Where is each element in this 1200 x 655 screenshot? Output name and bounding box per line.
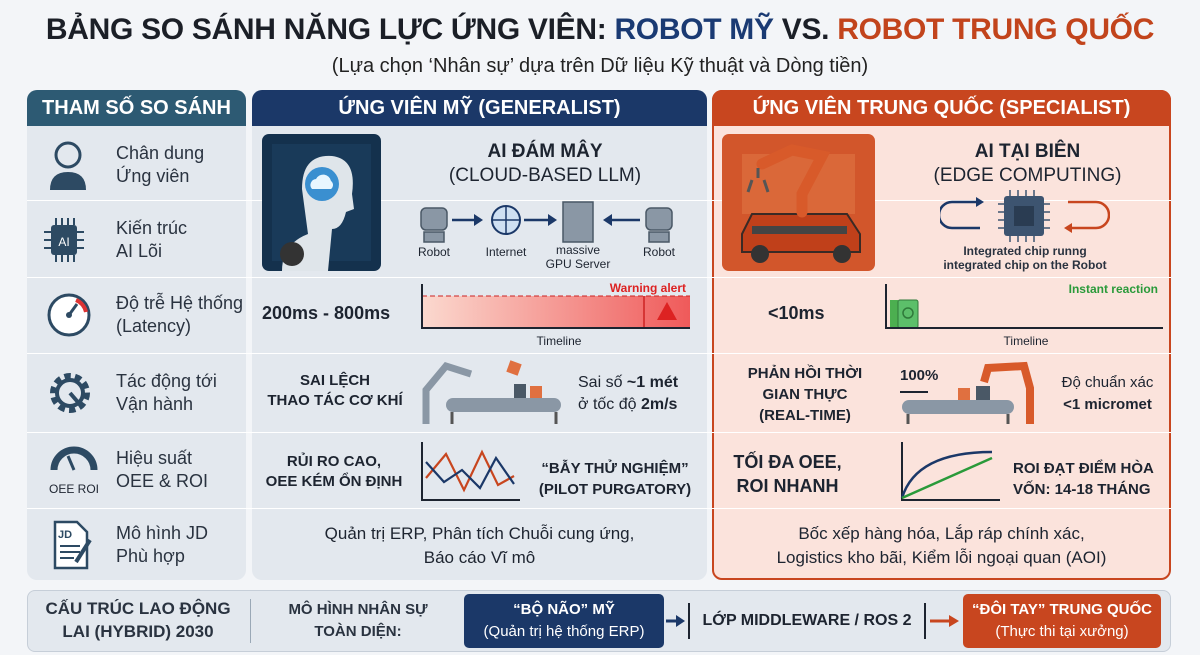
box: US brain — [464, 594, 664, 648]
heading: AI edge — [934, 140, 1121, 186]
text: ROI hòa vốn — [1013, 460, 1154, 498]
label: mô hình JD: Phù hợp — [116, 546, 185, 566]
subtitle: (Lựa chọn ‘Nhân sự’ dựa trên Dữ liệu Kỹ thuật và Dòng tiền) — [332, 55, 868, 77]
diagram: cloud flow: Robot — [643, 245, 676, 259]
chart: US latency timeline — [421, 281, 690, 348]
panel: China candidate: ỨNG VIÊN TRUNG QUỐC (SPECIALIST) — [753, 96, 1130, 118]
label: tác động: Vận hành — [116, 394, 193, 414]
heading: AI cloud: (CLOUD-BASED LLM) — [449, 165, 641, 186]
label: kiến trúc: Kiến trúc — [116, 218, 187, 238]
chart: US latency timeline: Timeline — [537, 334, 582, 348]
text: mô hình nhân sự: MÔ HÌNH NHÂN SỰ — [288, 601, 428, 618]
icon: OEE ROI gauge: OEE ROI — [49, 482, 99, 496]
text: bẫy thử nghiệm: (PILOT PURGATORY) — [539, 481, 691, 498]
label: chân dung: Chân dung — [116, 143, 204, 163]
label: kiến trúc: AI Lõi — [116, 241, 162, 261]
text: sai lệch: THAO TÁC CƠ KHÍ — [267, 392, 403, 409]
icon: JD document: JD — [58, 529, 72, 541]
icon: OEE ROI gauge — [49, 446, 99, 496]
text: tối đa OEE: TỐI ĐA OEE, — [733, 452, 842, 472]
text: tối đa OEE: ROI NHANH — [736, 476, 838, 496]
label: tác động — [116, 371, 217, 414]
text: US latency: 200ms - 800ms — [262, 303, 390, 323]
label: độ trễ — [116, 292, 243, 336]
icon: chip loop — [940, 190, 1110, 242]
label: hiệu suất: Hiệu suất — [116, 448, 192, 468]
image: US humanoid robot — [262, 134, 381, 271]
icon: robot arm conveyor US — [422, 360, 561, 424]
text: mô hình nhân sự: TOÀN DIỆN: — [314, 623, 402, 640]
text: sai số: Sai số ~1 mét — [578, 374, 678, 391]
icon: robot arm conveyor CN — [900, 362, 1034, 424]
panel: China candidate — [712, 90, 1171, 580]
arrow: to China hands — [930, 615, 959, 627]
panel: US candidate — [252, 90, 707, 580]
icon: AI chip — [44, 218, 84, 262]
chart: CN latency timeline: Instant reaction — [1069, 282, 1158, 296]
diagram: cloud flow: Internet — [486, 245, 527, 259]
box: US brain: (Quản trị hệ thống ERP) — [484, 623, 644, 640]
text: độ chuẩn xác: Độ chuẩn xác — [1062, 374, 1153, 391]
text: mô hình nhân sự — [288, 600, 428, 640]
box: China hands: “ĐÔI TAY” TRUNG QUỐC — [972, 601, 1152, 618]
text: hybrid title: CẤU TRÚC LAO ĐỘNG — [45, 599, 231, 618]
icon: gear — [50, 373, 90, 413]
text: rủi ro: OEE KÉM ỔN ĐỊNH — [266, 473, 402, 490]
text: US JD: Quản trị ERP, Phân tích Chuỗi cung ứng, — [325, 524, 634, 543]
text: CN JD: Bốc xếp hàng hóa, Lắp ráp chính xác, — [798, 524, 1085, 543]
panel: parameters: THAM SỐ SO SÁNH — [42, 96, 231, 118]
text: middleware — [688, 603, 926, 639]
panel: US candidate: ỨNG VIÊN MỸ (GENERALIST) — [338, 96, 621, 118]
panel: parameters — [27, 90, 246, 580]
icon: robot arm conveyor CN: 100% — [900, 367, 938, 384]
text: chip caption — [943, 244, 1107, 272]
text: phản hồi thời gian thực: GIAN THỰC — [763, 386, 847, 403]
box: US brain: “BỘ NÃO” MỸ — [513, 601, 615, 618]
text: sai lệch — [267, 372, 403, 409]
icon: JD document — [54, 520, 92, 570]
text: sai số — [578, 374, 678, 413]
diagram: cloud flow — [418, 201, 676, 271]
chart: CN latency timeline — [885, 282, 1163, 348]
label: mô hình JD: Mô hình JD — [116, 523, 208, 543]
label: độ trễ: Độ trễ Hệ thống — [116, 293, 243, 313]
diagram: cloud flow: Robot — [418, 245, 451, 259]
text: hybrid title: LAI (HYBRID) 2030 — [62, 622, 214, 641]
label: chân dung: Ứng viên — [116, 166, 189, 186]
text: CN latency: <10ms — [768, 303, 825, 323]
title: BẢNG SO SÁNH NĂNG LỰC ỨNG VIÊN: ROBOT MỸ VS. ROBOT TRUNG QUỐC — [46, 13, 1154, 46]
text: tối đa OEE — [733, 451, 842, 496]
chart: unstable lines — [421, 442, 520, 501]
text: CN JD — [777, 524, 1106, 567]
text: phản hồi thời gian thực: PHẢN HỒI THỜI — [748, 365, 862, 382]
chart: US latency timeline: Warning alert — [610, 281, 686, 295]
text: bẫy thử nghiệm: “BẪY THỬ NGHIỆM” — [541, 460, 689, 477]
text: middleware: LỚP MIDDLEWARE / ROS 2 — [703, 612, 911, 629]
label: mô hình JD — [116, 523, 208, 566]
diagram: cloud flow: GPU Server — [546, 257, 610, 271]
label: hiệu suất: OEE & ROI — [116, 471, 208, 491]
label: tác động: Tác động tới — [116, 371, 217, 391]
text: CN JD: Logistics kho bãi, Kiểm lỗi ngoại quan (AOI) — [777, 548, 1106, 567]
text: US JD: Báo cáo Vĩ mô — [424, 548, 535, 567]
panel: hybrid structure bar — [27, 590, 1171, 652]
chart: CN latency timeline: Timeline — [1004, 334, 1049, 348]
chart: growth curve — [900, 442, 1000, 501]
label: chân dung — [116, 143, 204, 186]
text: hybrid title — [45, 598, 231, 641]
text: ROI hòa vốn: ROI ĐẠT ĐIỂM HÒA — [1013, 460, 1154, 477]
diagram: cloud flow: massive — [556, 243, 600, 257]
text: phản hồi thời gian thực: (REAL-TIME) — [759, 407, 851, 424]
label: độ trễ: (Latency) — [116, 316, 191, 336]
image: China robot arm on AGV — [722, 134, 875, 271]
text: sai lệch: SAI LỆCH — [300, 372, 370, 389]
heading: AI edge: AI TẠI BIÊN — [975, 141, 1080, 162]
box: China hands: (Thực thi tại xưởng) — [995, 623, 1129, 640]
label: kiến trúc — [116, 218, 187, 261]
heading: AI cloud: AI ĐÁM MÂY — [487, 141, 603, 162]
box: China hands — [963, 594, 1161, 648]
label: hiệu suất — [116, 448, 208, 491]
text: rủi ro: RỦI RO CAO, — [287, 453, 381, 470]
text: rủi ro — [266, 452, 402, 490]
heading: AI edge: (EDGE COMPUTING) — [934, 165, 1121, 186]
heading: AI cloud — [449, 140, 641, 186]
text: ROI hòa vốn: VỐN: 14-18 THÁNG — [1013, 481, 1151, 498]
icon: AI chip: AI — [58, 235, 70, 249]
text: US JD — [325, 524, 634, 567]
text: chip caption: Integrated chip runng — [963, 244, 1087, 258]
icon: person — [50, 142, 86, 190]
text: độ chuẩn xác — [1062, 374, 1153, 413]
text: sai số: ở tốc độ 2m/s — [578, 396, 677, 413]
text: bẫy thử nghiệm — [539, 460, 691, 498]
text: độ chuẩn xác: <1 micromet — [1063, 396, 1152, 413]
text: phản hồi thời gian thực — [748, 364, 862, 424]
text: chip caption: integrated chip on the Robot — [943, 258, 1107, 272]
arrow: to middleware — [666, 615, 685, 627]
icon: gauge — [48, 294, 90, 336]
